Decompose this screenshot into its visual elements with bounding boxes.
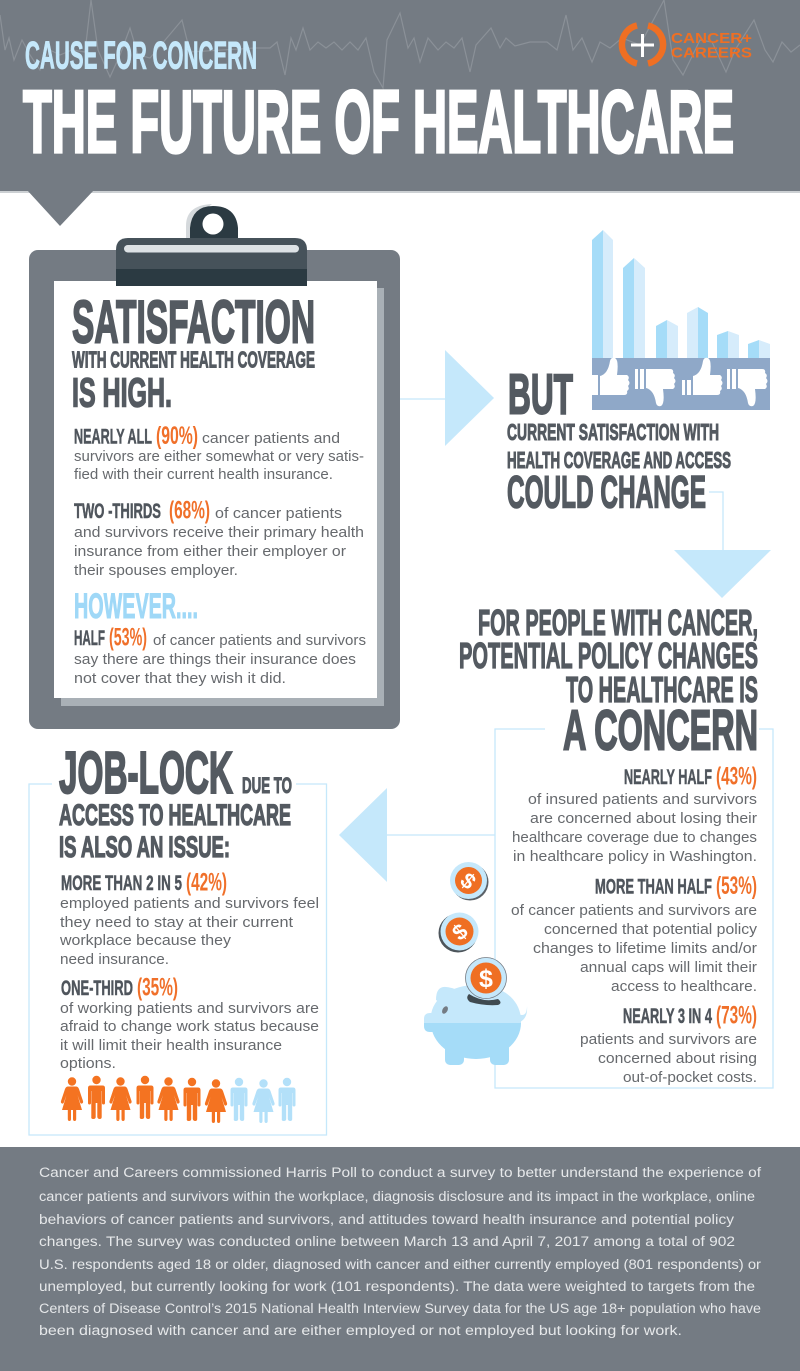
text block: nearly all 90%: NEARLY ALL	[74, 426, 152, 448]
heading: however: HOWEVER....	[74, 587, 198, 626]
icon: coin: $	[479, 965, 493, 993]
text block: more than 2 in 5 42%: need insurance.	[60, 952, 169, 968]
text block: one-third 35%: it will limit their health insurance	[60, 1038, 282, 1054]
text block: nearly all 90%	[74, 422, 364, 483]
icon: thumb down	[727, 369, 768, 406]
text block: one-third 35%: of working patients and survivors are	[60, 1001, 319, 1017]
text block: nearly 3 in 4 73%	[580, 1002, 757, 1086]
chart: bars and thumbs	[592, 230, 770, 410]
text block: more than half 53%: of cancer patients and survivors are	[511, 903, 757, 919]
logo	[622, 26, 752, 64]
text block: more than half 53%: changes to lifetime limits and/or	[533, 941, 757, 957]
heading: job-lock: DUE TO	[242, 773, 292, 798]
icon: coin	[438, 912, 478, 952]
heading: satisfaction	[72, 288, 315, 416]
text block: nearly 3 in 4 73%: (73%)	[716, 1002, 757, 1030]
text block: more than 2 in 5 42%: they need to stay at their current	[60, 915, 293, 931]
text block: methodology: U.S. respondents aged 18 or older, diagnosed with cancer and either currently employed (801 respondents) or	[39, 1257, 762, 1272]
icon: coin	[450, 862, 488, 900]
text block: half 53%: HALF	[74, 627, 105, 650]
text block: methodology: changes. The survey was conducted online between March 13 and April 7, 2017 among a total of 902	[39, 1234, 735, 1249]
text block: half 53%: (53%)	[109, 624, 147, 652]
text block: more than half 53%	[511, 872, 758, 995]
heading: job-lock: IS ALSO AN ISSUE:	[59, 831, 230, 864]
icon: piggy bank with coins	[424, 862, 527, 1065]
text block: one-third 35%	[60, 974, 319, 1072]
text block: nearly half 43%: (43%)	[716, 762, 757, 790]
text block: methodology: been diagnosed with cancer and are either employed or not employed but looking for work.	[39, 1323, 682, 1338]
text block: nearly 3 in 4 73%: out-of-pocket costs.	[623, 1070, 757, 1086]
text block: more than half 53%: annual caps will limit their	[580, 960, 757, 976]
text block: one-third 35%: ONE-THIRD	[61, 977, 133, 1000]
text block: nearly all 90%: survivors are either somewhat or very satis-	[74, 449, 364, 465]
arrow: down	[674, 550, 771, 598]
text block: methodology: Cancer and Careers commissioned Harris Poll to conduct a survey to better understand the experience of	[39, 1165, 761, 1180]
text block: one-third 35%: options.	[60, 1056, 116, 1072]
text block: nearly all 90%: cancer patients and	[202, 431, 340, 447]
panel: job-lock	[29, 740, 326, 1135]
logo: CANCER+	[671, 30, 752, 47]
text block: more than 2 in 5 42%: MORE THAN 2 IN 5	[61, 872, 182, 895]
icon row: people 7 of 10	[61, 1076, 296, 1123]
text block: half 53%: say there are things their insurance does	[74, 652, 356, 668]
text block: two-thirds 68%: their spouses employer.	[74, 563, 238, 579]
text block: nearly half 43%: are concerned about losing their	[530, 811, 757, 827]
text block: more than half 53%: access to healthcare.	[611, 979, 757, 995]
text block: methodology: Centers of Disease Control’s 2015 National Health Interview Survey data for the US age 18+ population who have	[39, 1301, 761, 1316]
panel: clipboard satisfaction	[29, 204, 400, 729]
icon: clipboard clip	[116, 204, 307, 286]
text block: nearly half 43%	[512, 762, 757, 865]
arrow: left	[339, 788, 387, 882]
text block: two-thirds 68%: of cancer patients	[215, 506, 342, 522]
text block: half 53%	[74, 624, 366, 687]
icon: coin	[466, 958, 506, 998]
text block: two-thirds 68%: insurance from either their employer or	[74, 544, 346, 560]
heartbeat line	[0, 0, 800, 88]
text block: one-third 35%: afraid to change work status because	[60, 1019, 319, 1035]
text block: more than 2 in 5 42%	[59, 868, 319, 968]
text block: nearly half 43%: healthcare coverage due to changes	[512, 830, 757, 846]
text block: methodology: behaviors of cancer patients and survivors, and attitudes toward health insurance and potential policy	[39, 1212, 734, 1227]
text block: nearly half 43%: NEARLY HALF	[624, 766, 712, 789]
panel: policy concerns	[495, 729, 773, 1088]
heading: policy changes concern	[459, 602, 758, 762]
arrow: right	[445, 350, 494, 446]
panel: survey methodology	[0, 1147, 800, 1371]
icon: piggy bank	[424, 985, 527, 1065]
heading: satisfaction: SATISFACTION	[72, 288, 315, 356]
icon: thumb up	[682, 358, 722, 395]
heading: job-lock: ACCESS TO HEALTHCARE	[59, 799, 291, 832]
small heading: CAUSE FOR CONCERN	[25, 34, 257, 78]
text block: more than 2 in 5 42%: employed patients and survivors feel	[60, 896, 319, 912]
icon: thumb up	[592, 358, 630, 395]
text block: nearly 3 in 4 73%: concerned about rising	[598, 1051, 757, 1067]
heading: but could change: BUT	[508, 362, 573, 426]
text block: nearly half 43%: in healthcare policy in Washington.	[513, 849, 757, 865]
text block: more than half 53%: concerned that potential policy	[544, 922, 758, 938]
text block: nearly all 90%: fied with their current health insurance.	[74, 467, 333, 483]
connector lines	[387, 399, 723, 835]
heading: satisfaction: WITH CURRENT HEALTH COVERAGE	[72, 346, 315, 372]
logo: CAREERS	[671, 44, 752, 62]
text block: two-thirds 68%: and survivors receive their primary health	[74, 525, 364, 541]
text block: one-third 35%: (35%)	[137, 974, 178, 1002]
text block: methodology	[39, 1165, 762, 1338]
heading: job-lock	[59, 740, 292, 864]
heading: satisfaction: IS HIGH.	[72, 370, 172, 416]
text block: more than 2 in 5 42%: (42%)	[186, 868, 227, 896]
text block: nearly half 43%: of insured patients and survivors	[528, 792, 757, 808]
text block: methodology: cancer patients and survivors within the workplace, diagnosis disclosure and its impact in the workplace, online	[39, 1189, 755, 1204]
text block: nearly 3 in 4 73%: patients and survivors are	[580, 1032, 757, 1048]
text block: half 53%: not cover that they wish it did.	[74, 671, 286, 687]
text block: methodology: unemployed, but currently looking for work (101 respondents). The data were weighted to targets from the	[39, 1279, 755, 1294]
text block: more than half 53%: (53%)	[716, 872, 757, 900]
text block: more than 2 in 5 42%: workplace because they	[59, 933, 232, 949]
text block: half 53%: of cancer patients and survivors	[153, 633, 366, 649]
heading: but could change	[507, 362, 731, 518]
icon: coin: $	[447, 918, 473, 945]
text block: two-thirds 68%: TWO -THIRDS	[74, 500, 161, 523]
bar chart	[592, 230, 770, 358]
header banner	[0, 0, 800, 226]
text block: more than half 53%: MORE THAN HALF	[595, 876, 712, 898]
text block: two-thirds 68%: (68%)	[169, 496, 210, 524]
text block: nearly 3 in 4 73%: NEARLY 3 IN 4	[623, 1005, 712, 1028]
icon: thumb down	[635, 369, 676, 406]
text block: two-thirds 68%	[74, 496, 364, 579]
icon: coin: $	[455, 867, 481, 894]
heading: job-lock: JOB-LOCK	[59, 740, 233, 806]
text block: nearly all 90%: (90%)	[156, 422, 198, 450]
